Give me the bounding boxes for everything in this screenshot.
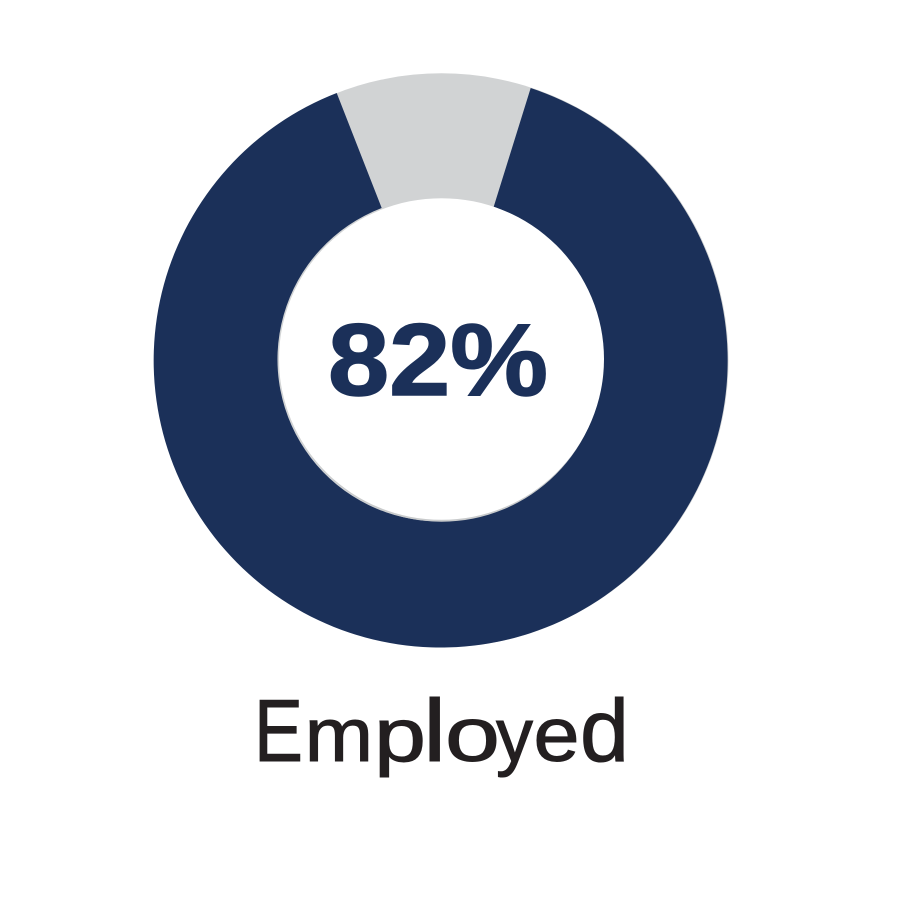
label: Employed: e bbox=[534, 693, 580, 778]
label: Employed: p bbox=[374, 693, 426, 778]
label: Employed: y bbox=[496, 693, 533, 778]
label: Employed: o bbox=[445, 693, 500, 778]
donut segment: navy 82% bbox=[154, 88, 728, 648]
donut hole bbox=[279, 198, 604, 520]
hole edge: thin grey crescent bbox=[280, 198, 603, 522]
label: Employed: E bbox=[254, 681, 303, 780]
label: Employed: d bbox=[580, 681, 629, 780]
donut chart: 82% employed bbox=[154, 73, 728, 648]
label: Employed: l bbox=[423, 681, 446, 780]
donut track: grey remainder bbox=[154, 73, 728, 647]
label: Employed: m bbox=[305, 693, 373, 778]
percentage value: 82% bbox=[328, 303, 548, 417]
